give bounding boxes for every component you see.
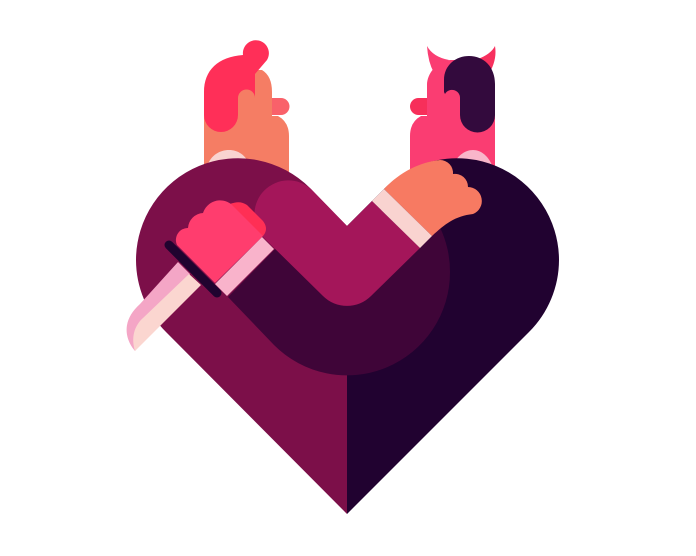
right hand and cuff	[372, 160, 482, 248]
figure: man's head	[204, 40, 290, 172]
thumb	[230, 202, 266, 236]
arm: crimson sleeve	[254, 180, 420, 306]
heart left half	[136, 158, 347, 514]
blade pink side	[127, 262, 190, 351]
devil's right horn	[478, 46, 496, 70]
pink cuff	[215, 237, 274, 296]
devil's left horn	[427, 46, 449, 73]
arm: dark plum sleeve curve	[228, 199, 450, 375]
devil's hair	[444, 56, 495, 132]
devil's collar	[452, 150, 493, 168]
heart	[136, 158, 559, 514]
knife	[127, 245, 217, 351]
salmon fist	[384, 160, 482, 236]
pale cuff	[372, 189, 432, 248]
devil's face and neck	[410, 60, 495, 172]
pink fist	[176, 200, 263, 283]
man's collar	[207, 150, 250, 166]
heart right half	[347, 158, 559, 514]
left hand and cuff	[176, 200, 274, 296]
figure: devil's head	[410, 46, 496, 172]
devil's nose	[410, 98, 427, 115]
man's face and neck	[204, 70, 289, 172]
handguard	[169, 245, 217, 293]
blade pale side	[133, 274, 201, 351]
man's hair	[204, 40, 269, 132]
man's nose	[272, 98, 290, 115]
